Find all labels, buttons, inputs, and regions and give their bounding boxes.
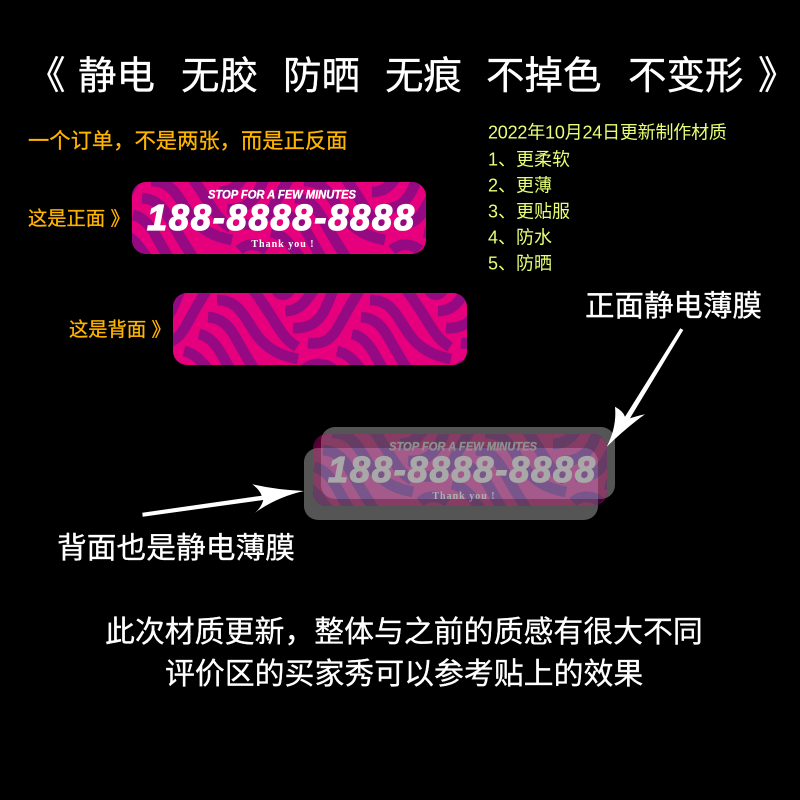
layered sticker with static films: 188-8888-8888 — [328, 449, 595, 490]
layered sticker with static films: Thank you ! — [432, 491, 496, 502]
front film label: 正面静电薄膜 — [585, 290, 762, 323]
front label: 这是正面 》 — [28, 208, 130, 230]
back sticker — [173, 293, 467, 365]
material update list — [488, 122, 727, 274]
title: 不变形 — [628, 55, 744, 98]
arrow: back film — [142, 484, 304, 517]
bottom note: 此次材质更新，整体与之前的质感有很大不同 — [105, 607, 703, 651]
back label: 这是背面 》 — [69, 319, 171, 341]
front sticker: 188-8888-8888 — [147, 197, 414, 238]
layered sticker with static films — [304, 427, 615, 520]
front sticker — [132, 182, 426, 254]
order note: 一个订单，不是两张，而是正反面 — [28, 124, 347, 155]
back film label: 背面也是静电薄膜 — [57, 532, 295, 565]
bottom note — [105, 607, 703, 693]
front sticker: Thank you ! — [251, 239, 315, 250]
title: 静电 — [78, 55, 155, 98]
title: 》 — [758, 55, 797, 98]
material update list: 5、防晒 — [488, 254, 552, 274]
title: 无痕 — [385, 55, 462, 98]
title — [27, 55, 797, 98]
layered sticker with static films: STOP FOR A FEW MINUTES — [389, 442, 537, 454]
front sticker: STOP FOR A FEW MINUTES — [208, 190, 356, 202]
material update list: 4、防水 — [488, 228, 552, 248]
title: 无胶 — [181, 55, 258, 98]
title: 不掉色 — [486, 55, 602, 98]
material update list: 3、更贴服 — [488, 202, 570, 222]
material update list: 2022年10月24日更新制作材质 — [488, 122, 727, 142]
arrow: front film — [607, 328, 683, 447]
title: 防晒 — [283, 55, 360, 98]
material update list: 2、更薄 — [488, 176, 552, 196]
title: 《 — [27, 55, 66, 98]
material update list: 1、更柔软 — [488, 150, 570, 170]
bottom note: 评价区的买家秀可以参考贴上的效果 — [165, 649, 643, 693]
